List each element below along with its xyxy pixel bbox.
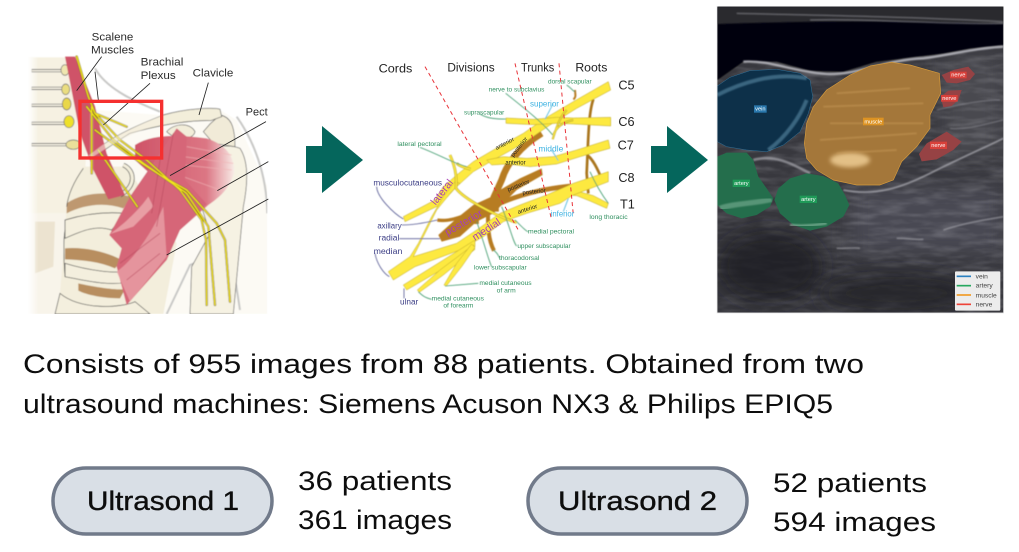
green branch labels: medial pectoral xyxy=(528,228,575,235)
panel: shoulder anatomy illustration: Plexus xyxy=(141,70,176,82)
region tags: nerve xyxy=(951,73,965,79)
purple terminal branch labels xyxy=(373,179,442,307)
legend: artery xyxy=(976,283,993,290)
green branch labels: of forearm xyxy=(443,302,474,309)
magenta cord labels xyxy=(429,177,503,244)
label: Brachial Plexus: Brachial xyxy=(141,57,183,69)
root labels C5 to T1 xyxy=(618,79,635,212)
bright fascia lines xyxy=(737,13,1003,248)
black division labels: posterior xyxy=(507,179,531,194)
legend: muscle xyxy=(976,293,997,300)
blue trunk labels: middle xyxy=(538,143,564,153)
purple terminal branch labels: musculocutaneous xyxy=(373,179,442,188)
region tags xyxy=(733,72,967,203)
headings: Cords Divisions Trunks Roots: Cords xyxy=(379,61,412,75)
red region box xyxy=(80,101,162,158)
purple terminal branch labels: ulnar xyxy=(400,298,419,307)
blue trunk labels xyxy=(530,98,574,219)
skin outline xyxy=(95,68,267,314)
headings: Cords Divisions Trunks Roots: Divisions xyxy=(447,61,495,75)
text block: dataset description: ultrasound machines: Siemens Acuson NX3 & Philips EPIQ5 xyxy=(23,389,833,419)
neck and chest skin backdrop xyxy=(86,108,267,314)
region tags: artery xyxy=(734,181,749,187)
headings: Cords Divisions Trunks Roots: Roots xyxy=(575,60,607,74)
blue trunk labels: inferior xyxy=(551,209,574,219)
rib cage xyxy=(55,167,177,314)
magenta cord labels: lateral xyxy=(429,177,456,208)
stats: Ultrasound 1 xyxy=(298,466,452,535)
panel: segmented ultrasound image xyxy=(717,6,1004,313)
green and blue leader lines xyxy=(418,85,608,299)
stats: Ultrasound 1: 36 patients xyxy=(298,466,452,496)
arrow: plexus diagram to ultrasound xyxy=(651,126,708,193)
muscle region xyxy=(804,62,941,185)
pill: Ultrasound 2 xyxy=(528,468,747,534)
text block: dataset description xyxy=(23,349,864,419)
dark upper tissue band xyxy=(717,7,1003,80)
scalene muscle xyxy=(65,57,125,199)
magenta cord labels: medial xyxy=(470,216,503,244)
leader lines xyxy=(77,57,268,255)
panel: shoulder anatomy illustration: Muscles xyxy=(91,44,134,56)
region tags: artery xyxy=(801,197,816,203)
red dashed boundary lines xyxy=(425,63,573,230)
legend xyxy=(955,271,1000,311)
green branch labels: upper subscapular xyxy=(517,243,571,250)
stats: Ultrasound 1: 361 images xyxy=(298,505,452,535)
arrow: anatomy to plexus diagram xyxy=(306,126,363,193)
region tags: vein xyxy=(755,107,766,113)
lower acoustic shadow xyxy=(717,230,823,303)
root labels C5 to T1: T1 xyxy=(620,198,635,212)
black division labels: anterior xyxy=(495,137,516,152)
pill: Ultrasound 1 xyxy=(53,468,272,534)
label: Clavicle: Clavicle xyxy=(193,68,233,80)
stats: Ultrasound 2 xyxy=(773,468,936,537)
pill: Ultrasound 1: Ultrasond 1 xyxy=(87,486,239,516)
green branch labels: lateral pectoral xyxy=(397,141,442,148)
green branch labels: medial cutaneous xyxy=(479,280,532,287)
region tags: nerve xyxy=(931,143,945,149)
purple terminal branch labels: radial xyxy=(379,234,400,243)
panel: shoulder anatomy illustration xyxy=(28,32,268,314)
stats: Ultrasound 2: 594 images xyxy=(773,507,936,537)
black division labels: posterior xyxy=(522,188,546,197)
label: Scalene Muscles: Scalene xyxy=(92,32,133,44)
humerus and scapula xyxy=(187,146,247,314)
headings: Cords Divisions Trunks Roots xyxy=(379,60,607,75)
green branch labels: suprascapular xyxy=(464,110,505,117)
green branch labels: dorsal scapular xyxy=(548,78,592,85)
stats: Ultrasound 2: 52 patients xyxy=(773,468,927,498)
panel: brachial plexus diagram xyxy=(373,60,635,309)
blue trunk labels: superior xyxy=(530,98,559,108)
label: Pectoralis (cropped): Pect xyxy=(246,107,268,119)
green branch labels: nerve to subclavius xyxy=(489,87,545,94)
region tags: nerve xyxy=(942,96,956,102)
headings: Cords Divisions Trunks Roots: Trunks xyxy=(521,61,554,75)
purple terminal branch labels: axillary xyxy=(377,221,402,230)
yellow nerve trunks and cords xyxy=(388,82,611,292)
artery regions xyxy=(717,153,773,218)
lighter mid-right tissue xyxy=(850,187,1003,253)
pale clavicle overlay xyxy=(88,115,163,157)
green branch labels: long thoracic xyxy=(589,214,628,221)
black division labels: anterior xyxy=(517,204,538,216)
region tags: muscle xyxy=(864,119,882,125)
pectoralis minor and serratus muscles xyxy=(109,128,207,305)
legend: vein xyxy=(976,273,988,280)
legend: nerve xyxy=(976,302,993,309)
magenta cord labels: posterior xyxy=(443,207,485,239)
text block: dataset description: Consists of 955 images from 88 patients. Obtained from two xyxy=(23,349,864,379)
root labels C5 to T1: C7 xyxy=(618,139,634,153)
clavicle xyxy=(88,108,222,157)
root labels C5 to T1: C5 xyxy=(618,79,635,93)
green branch labels: thoracodorsal xyxy=(499,255,540,262)
brown posterior nerves xyxy=(437,99,600,251)
green branch labels: of arm xyxy=(497,287,516,294)
pectoralis major muscle xyxy=(135,136,234,230)
black division labels xyxy=(495,137,546,216)
green branch labels xyxy=(397,78,628,309)
vein region xyxy=(717,69,813,152)
nerve bundle xyxy=(77,57,230,305)
nerve regions xyxy=(942,67,975,83)
black division labels: posterior xyxy=(510,137,529,159)
pill: Ultrasound 2: Ultrasond 2 xyxy=(558,486,717,516)
vertebral processes xyxy=(32,71,67,145)
green branch labels: medial cutaneous xyxy=(432,296,485,303)
black division labels: anterior xyxy=(505,161,526,167)
green branch labels: lower subscapular xyxy=(474,265,527,272)
root labels C5 to T1: C8 xyxy=(618,171,635,185)
purple terminal branch labels: median xyxy=(374,247,402,256)
root labels C5 to T1: C6 xyxy=(618,115,635,129)
